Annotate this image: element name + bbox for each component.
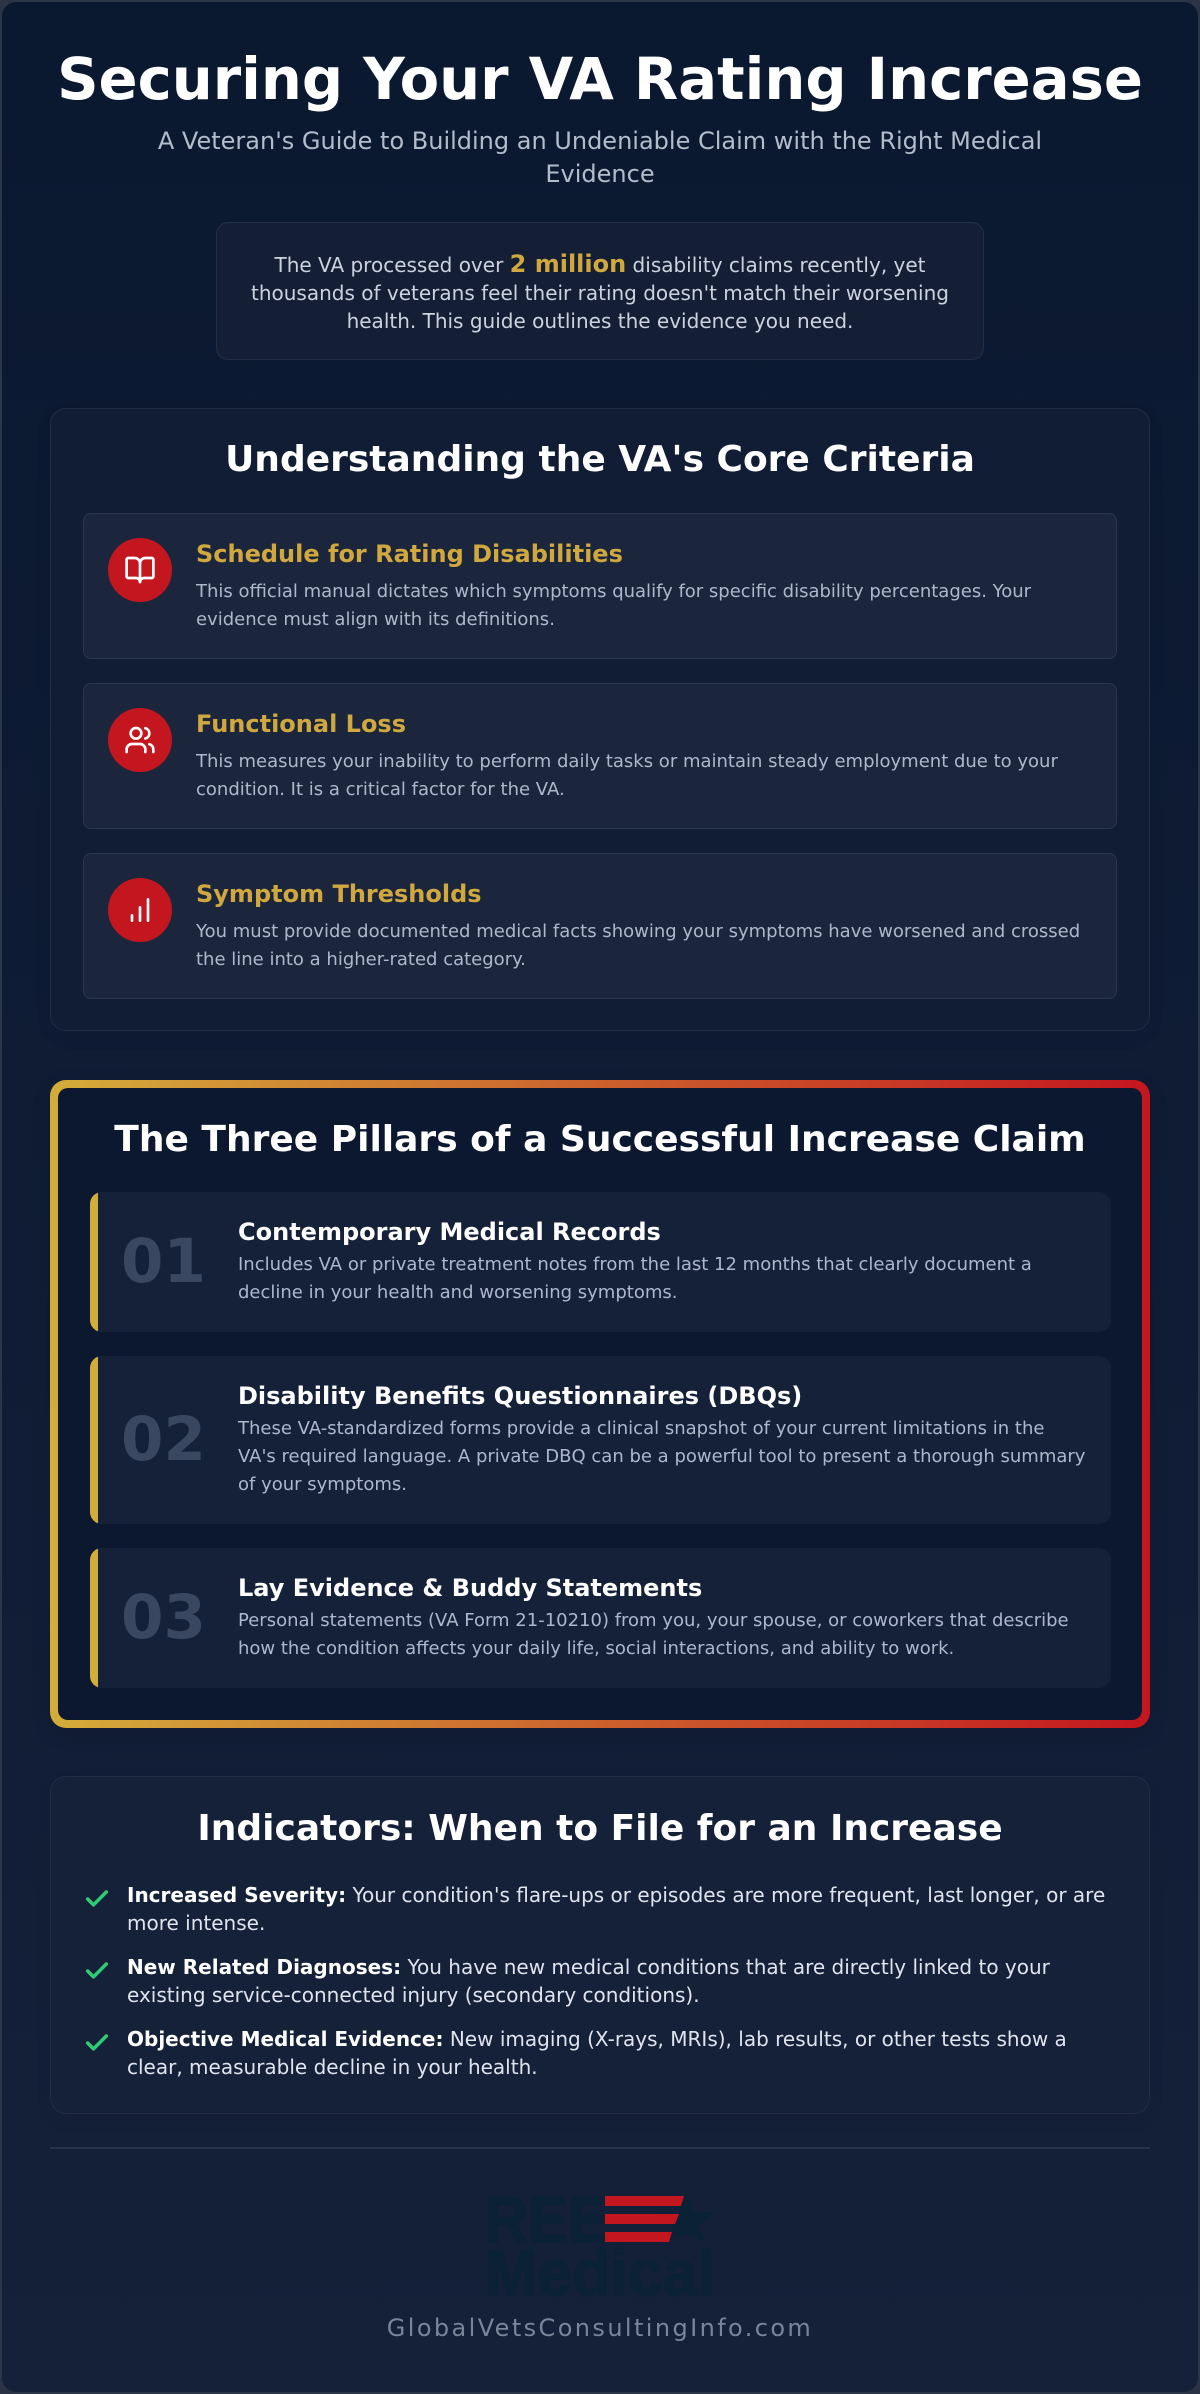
panel: intro callout (216, 222, 984, 360)
indicator text: Increased Severity: Your condition's flare-ups or episodes are more frequent, last longer, or are (127, 1883, 1105, 1907)
card text: the line into a higher-rated category. (196, 949, 526, 970)
panel inner (58, 1088, 1142, 1720)
pillar 01 (90, 1192, 1111, 1332)
icon: check (86, 1962, 108, 1979)
pillar text: VA's required language. A private DBQ can be a powerful tool to present a thorough summary (238, 1446, 1085, 1467)
intro text (251, 250, 949, 333)
number: 01 (121, 1226, 206, 1297)
heading: indicators: Indicators: When to File for an Increase (197, 1808, 1003, 1849)
card: symptom thresholds (83, 853, 1117, 999)
icon: bar chart (108, 878, 172, 942)
card text: You must provide documented medical facts showing your symptoms have worsened and crossed (196, 921, 1080, 942)
indicator text (127, 1883, 1105, 1935)
indicator text: New Related Diagnoses: You have new medical conditions that are directly linked to your (127, 1955, 1050, 1979)
card text: This measures your inability to perform daily tasks or maintain steady employment due to your (196, 751, 1058, 772)
icon: open book (108, 538, 172, 602)
indicator: new related diagnoses (86, 1955, 1050, 2007)
pillar text (238, 1610, 1069, 1659)
pillar text: Personal statements (VA Form 21-10210) from you, your spouse, or coworkers that describe (238, 1610, 1069, 1631)
card text (196, 921, 1080, 970)
pillar text (238, 1418, 1085, 1495)
card title: Schedule for Rating Disabilities (196, 540, 623, 568)
pillar text: of your symptoms. (238, 1474, 407, 1495)
intro text: health. This guide outlines the evidence you need. (347, 309, 853, 333)
footer logo: Medical (485, 2236, 715, 2309)
footer logo: REE (485, 2183, 608, 2256)
pillar text: These VA-standardized forms provide a clinical snapshot of your current limitations in the (238, 1418, 1044, 1439)
accent bar (90, 1192, 98, 1332)
card: functional loss (83, 683, 1117, 829)
accent bar (90, 1548, 98, 1688)
heading: pillars: The Three Pillars of a Successful Increase Claim (114, 1119, 1086, 1160)
subtitle: Evidence (545, 160, 655, 188)
indicator text: clear, measurable decline in your health. (127, 2055, 538, 2079)
card text (196, 581, 1031, 630)
title: Securing Your VA Rating Increase (57, 46, 1143, 113)
icon: check (86, 2034, 108, 2051)
card text: evidence must align with its definitions. (196, 609, 555, 630)
footer website: GlobalVetsConsultingInfo.com (387, 2314, 813, 2342)
pillar title: Lay Evidence & Buddy Statements (238, 1574, 702, 1602)
number: 03 (121, 1582, 206, 1653)
pillar 02 (90, 1356, 1111, 1524)
number: 02 (121, 1404, 206, 1475)
card title: Functional Loss (196, 710, 406, 738)
pillar text: decline in your health and worsening symptoms. (238, 1282, 677, 1303)
icon: check (86, 1890, 108, 1907)
heading: core criteria: Understanding the VA's Core Criteria (225, 439, 975, 480)
indicator: increased severity (86, 1883, 1105, 1935)
card text: This official manual dictates which symptoms qualify for specific disability percentages. Your (196, 581, 1031, 602)
intro text: thousands of veterans feel their rating doesn't match their worsening (251, 281, 949, 305)
card text: condition. It is a critical factor for the VA. (196, 779, 565, 800)
pillar text: how the condition affects your daily life, social interactions, and ability to work. (238, 1638, 954, 1659)
pillar title: Disability Benefits Questionnaires (DBQs) (238, 1382, 802, 1410)
indicator text (127, 1955, 1050, 2007)
panel: indicators (50, 1776, 1150, 2114)
subtitle: A Veteran's Guide to Building an Undeniable Claim with the Right Medical (158, 127, 1042, 155)
pillar 03 (90, 1548, 1111, 1688)
indicator text (127, 2027, 1067, 2079)
indicator: objective medical evidence (86, 2027, 1067, 2079)
subtitle (158, 127, 1042, 188)
icon: people (108, 708, 172, 772)
pillar text (238, 1254, 1032, 1303)
panel: core criteria (50, 408, 1150, 1031)
intro text: The VA processed over 2 million disability claims recently, yet (274, 250, 926, 278)
indicator text: more intense. (127, 1911, 265, 1935)
accent bar (90, 1356, 98, 1524)
indicator text: Objective Medical Evidence: New imaging (X-rays, MRIs), lab results, or other tests show a (127, 2027, 1067, 2051)
indicator text: existing service-connected injury (secondary conditions). (127, 1983, 700, 2007)
pillar text: Includes VA or private treatment notes from the last 12 months that clearly document a (238, 1254, 1032, 1275)
card title: Symptom Thresholds (196, 880, 482, 908)
card: schedule for rating disabilities (83, 513, 1117, 659)
card text (196, 751, 1058, 800)
panel: three pillars with gradient border (50, 1080, 1150, 1728)
pillar title: Contemporary Medical Records (238, 1218, 661, 1246)
